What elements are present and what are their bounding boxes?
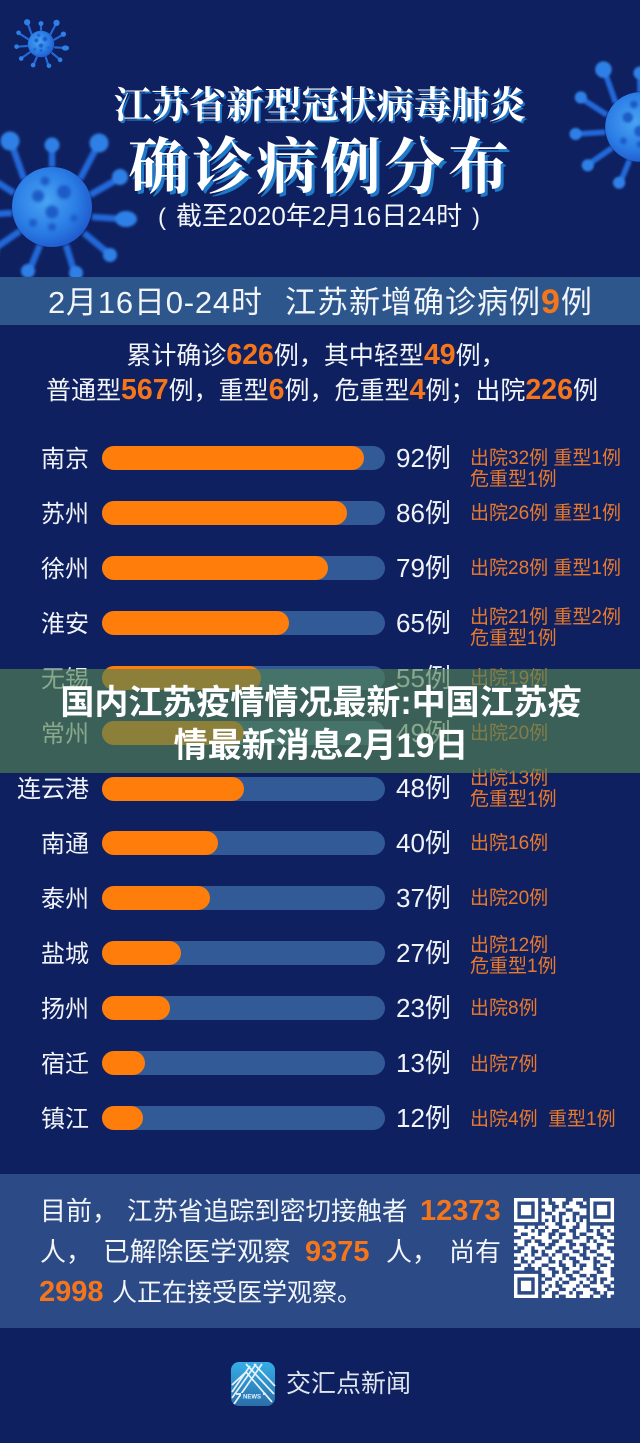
row: 南京: 出院32例 重型1例 [470, 447, 621, 469]
icon: QR code [514, 1200, 614, 1296]
row: 连云港: 危重型1例 [470, 788, 557, 810]
row: 镇江 [41, 1103, 616, 1133]
contacts text: 目前， [40, 1196, 118, 1226]
row: 徐州 [41, 553, 621, 583]
icon: app logo: NEWS [243, 1394, 261, 1400]
row: 宿迁 [41, 1048, 538, 1078]
row: 无锡: 无锡 [41, 666, 89, 693]
row: 连云港: 连云港 [17, 776, 89, 803]
row: 盐城: 危重型1例 [470, 955, 557, 977]
contacts text: 人， [386, 1237, 438, 1267]
row: 镇江: 出院4例 [470, 1108, 538, 1130]
title: 确诊病例分布 [128, 119, 512, 206]
row: 连云港: 48例 [396, 773, 451, 803]
totals text: 累计确诊626例，其中轻型49例， [126, 339, 506, 371]
row: 镇江: 镇江 [41, 1106, 89, 1133]
row: 徐州: 出院28例 重型1例 [470, 557, 621, 579]
subtitle date: ) [472, 204, 480, 231]
row: 南通: 出院16例 [470, 832, 548, 854]
row: 镇江: 重型1例 [548, 1108, 616, 1130]
row: 无锡 [41, 663, 548, 693]
row: 宿迁: 出院7例 [470, 1053, 538, 1075]
row: 苏州: 苏州 [41, 501, 89, 528]
row: 苏州: 86例 [396, 498, 451, 528]
row: 南通: 40例 [396, 828, 451, 858]
contacts text: 人正在接受医学观察。 [112, 1279, 362, 1307]
totals text: 普通型567例，重型6例，危重型4例；出院226例 [46, 374, 598, 406]
band: daily new cases: 江苏新增确诊病例9例 [285, 283, 593, 321]
brand name: 交汇点新闻 [286, 1370, 411, 1398]
contacts text: 人， [40, 1237, 92, 1267]
panel: close contacts [0, 1174, 640, 1328]
row: 宿迁: 宿迁 [41, 1051, 89, 1078]
row: 盐城: 27例 [396, 938, 451, 968]
row: 扬州 [41, 993, 538, 1023]
row: 盐城: 出院12例 [470, 934, 548, 956]
row: 泰州: 37例 [396, 883, 451, 913]
row: 常州: 49例 [396, 718, 451, 748]
logo: 交汇点新闻 [231, 1362, 411, 1406]
row: 连云港 [17, 767, 557, 810]
title: 江苏省新型冠状病毒肺炎 [114, 75, 529, 129]
contacts text [39, 1195, 501, 1308]
row: 泰州 [41, 883, 548, 913]
row: 徐州: 79例 [396, 553, 451, 583]
row: 淮安: 淮安 [41, 611, 89, 638]
title [114, 75, 531, 209]
contacts text: 尚有 [449, 1237, 501, 1267]
subtitle date: 截至2020年2月16日24时 [176, 201, 462, 231]
row: 连云港: 出院13例 [470, 767, 548, 789]
overlay banner: 国内江苏疫情情况最新:中国江苏疫 [60, 684, 582, 722]
row: 常州 [41, 718, 548, 748]
row: 淮安: 65例 [396, 608, 451, 638]
row: 南京: 危重型1例 [470, 468, 557, 490]
title: 江苏省新型冠状病毒肺炎 [116, 77, 531, 131]
row: 扬州: 出院8例 [470, 997, 538, 1019]
row: 徐州: 徐州 [41, 556, 89, 583]
row: 无锡: 55例 [396, 663, 451, 693]
row: 盐城: 盐城 [41, 941, 89, 968]
row: 苏州: 出院26例 重型1例 [470, 502, 621, 524]
overlay banner [0, 669, 640, 773]
subtitle date: ( [158, 204, 166, 231]
row: 南京: 南京 [41, 446, 89, 473]
row: 南京: 92例 [396, 443, 451, 473]
band: daily new cases: 2月16日0-24时 [48, 285, 263, 320]
row: 淮安: 危重型1例 [470, 627, 557, 649]
row: 盐城 [41, 934, 557, 977]
contacts text: 12373 [420, 1195, 501, 1227]
row: 常州: 出院20例 [470, 722, 548, 744]
contacts text: 2998 [39, 1276, 104, 1308]
icon: virus right edge [570, 61, 640, 191]
row: 扬州: 扬州 [41, 996, 89, 1023]
row: 苏州 [41, 498, 621, 528]
contacts text: 江苏省追踪到密切接触者 [127, 1198, 408, 1226]
overlay banner: 情最新消息2月19日 [174, 727, 468, 765]
title: 确诊病例分布 [131, 122, 515, 209]
row: 淮安 [41, 606, 621, 649]
row: 镇江: 12例 [396, 1103, 451, 1133]
bar chart: cases by city [17, 443, 621, 1133]
row: 泰州: 出院20例 [470, 887, 548, 909]
totals text [46, 339, 598, 406]
row: 扬州: 23例 [396, 993, 451, 1023]
row: 宿迁: 13例 [396, 1048, 451, 1078]
row: 南通: 南通 [41, 831, 89, 858]
icon: large virus left [0, 132, 137, 280]
row: 常州: 常州 [41, 721, 89, 748]
row: 南京 [41, 443, 621, 490]
contacts text: 9375 [305, 1236, 370, 1268]
row: 泰州: 泰州 [41, 886, 89, 913]
band: daily new cases [0, 277, 640, 325]
row: 淮安: 出院21例 重型2例 [470, 606, 621, 628]
icon: small virus top left [14, 19, 69, 68]
contacts text: 已解除医学观察 [103, 1237, 291, 1267]
row: 南通 [41, 828, 548, 858]
icon: app logo [231, 1362, 275, 1406]
row: 无锡: 出院19例 [470, 667, 548, 689]
